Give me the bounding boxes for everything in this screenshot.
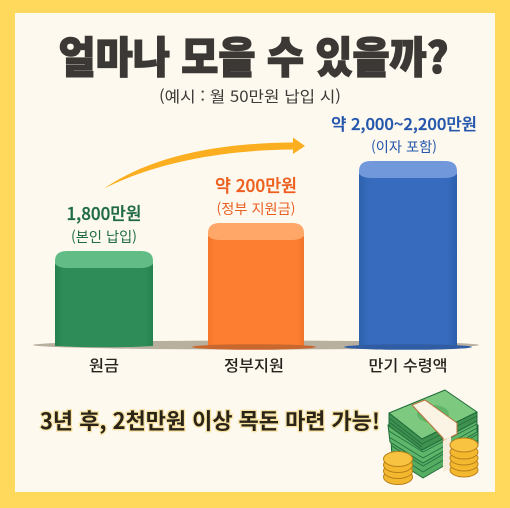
bar: principal bbox=[55, 251, 153, 347]
bar top: principal bbox=[55, 251, 153, 268]
label: government amount: 약 200만원 bbox=[215, 173, 297, 198]
bar: maturity amount bbox=[344, 161, 472, 350]
bar foot: government support bbox=[192, 344, 316, 350]
icon: money stack and coins bbox=[384, 390, 478, 484]
bar: government support bbox=[192, 223, 316, 350]
coin stack left bbox=[384, 452, 412, 484]
bar top: maturity amount bbox=[359, 161, 457, 178]
bar foot: maturity amount bbox=[344, 344, 472, 350]
label: principal amount: 1,800만원 bbox=[66, 201, 142, 226]
growth arrow bbox=[104, 138, 305, 188]
subtitle: (예시 : 월 50만원 납입 시) bbox=[159, 85, 341, 107]
label: principal amount bbox=[66, 201, 142, 247]
label: government amount bbox=[215, 173, 297, 219]
title: 얼마나 모을 수 있을까? bbox=[58, 24, 448, 86]
label: maturity amount bbox=[331, 111, 477, 157]
label: government amount: (정부 지원금) bbox=[216, 199, 296, 219]
label: maturity amount: 약 2,000~2,200만원 bbox=[331, 111, 477, 135]
top bill bbox=[389, 412, 477, 450]
bottom message: 3년 후, 2천만원 이상 목돈 마련 가능! bbox=[40, 404, 380, 436]
axis labels: 원금 bbox=[89, 354, 119, 376]
baseline shadow bbox=[33, 340, 479, 350]
middle bills bbox=[388, 418, 477, 463]
paper band bbox=[412, 400, 457, 441]
label: maturity amount: (이자 포함) bbox=[371, 137, 437, 157]
axis labels: 만기 수령액 bbox=[368, 354, 448, 376]
label: principal amount: (본인 납입) bbox=[71, 227, 137, 247]
axis labels: 정부지원 bbox=[224, 354, 284, 376]
bar top: government support bbox=[208, 223, 304, 240]
bottom bills bbox=[391, 425, 478, 478]
axis labels bbox=[89, 354, 448, 376]
coin stack right bbox=[450, 438, 478, 477]
